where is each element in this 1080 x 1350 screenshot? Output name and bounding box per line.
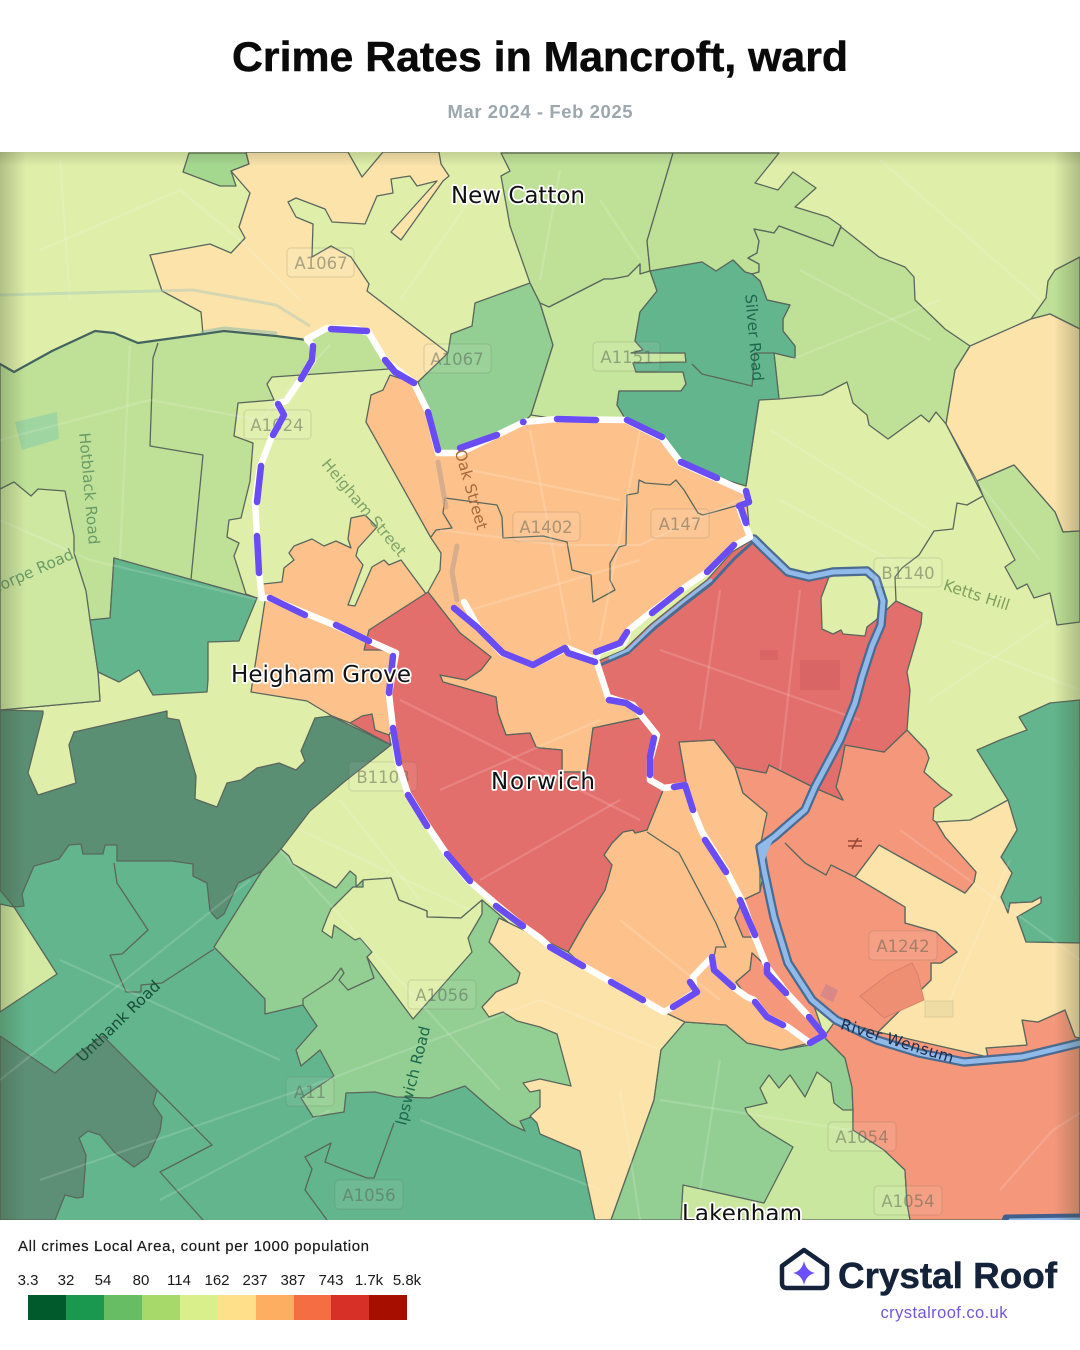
road name labels: Ketts Hill xyxy=(941,576,1012,614)
road name labels: Ipswich Road xyxy=(392,1024,434,1127)
legend scale values: 162 xyxy=(204,1272,230,1289)
legend scale values: 54 xyxy=(95,1272,111,1289)
place labels: Lakenham xyxy=(682,1201,802,1227)
road shields: A1067 xyxy=(430,350,484,369)
legend xyxy=(18,1238,422,1320)
road name labels: Silver Road xyxy=(741,293,767,382)
brand name: Crystal Roof xyxy=(838,1255,1058,1296)
road name labels: Hotblack Road xyxy=(75,432,103,545)
road shields xyxy=(244,248,942,1215)
ward boundary: white line southern loop xyxy=(255,339,824,1043)
ward boundary: white line xyxy=(307,328,750,665)
road name labels: Unthank Road xyxy=(73,977,164,1066)
place labels: Heigham Grove xyxy=(231,662,411,688)
legend scale values xyxy=(18,1272,422,1289)
choropleth map panel xyxy=(0,152,1080,1227)
legend scale values: 3.3 xyxy=(18,1272,38,1289)
ward boundary: purple dashes xyxy=(257,329,824,1043)
map regions: crime-rate shaded areas xyxy=(0,152,1080,1220)
road shields: A1054 xyxy=(835,1128,889,1147)
place labels xyxy=(231,183,802,1227)
grey road strip along Oak Street xyxy=(438,462,457,600)
legend scale values: 387 xyxy=(280,1272,306,1289)
River Wensum xyxy=(0,328,1080,1224)
road name labels xyxy=(0,293,1012,1127)
road shields: A1151 xyxy=(600,348,654,367)
brand logo xyxy=(782,1250,1058,1322)
legend scale values: 237 xyxy=(242,1272,268,1289)
legend colour bar xyxy=(28,1295,407,1320)
place labels: Norwich xyxy=(491,769,595,795)
road shields: B1108 xyxy=(356,768,410,787)
title: Crime Rates in Mancroft, ward xyxy=(232,33,848,80)
road shields: A1242 xyxy=(876,937,930,956)
brand url: crystalroof.co.uk xyxy=(880,1304,1008,1322)
boundary lines between neighbourhoods xyxy=(110,343,983,1220)
icon: railway station xyxy=(848,838,862,849)
subtitle: date range: Mar 2024 - Feb 2025 xyxy=(448,101,632,122)
legend scale values: 114 xyxy=(167,1272,191,1289)
road shields: A1054 xyxy=(881,1192,935,1211)
road shields: A147 xyxy=(659,515,701,534)
legend scale values: 32 xyxy=(58,1272,74,1289)
road shields: A1024 xyxy=(250,416,304,435)
legend title: All crimes Local Area, count per 1000 population xyxy=(18,1238,369,1255)
road shields: A1056 xyxy=(415,986,469,1005)
map edge vignette xyxy=(0,152,1080,1220)
street network overlay xyxy=(0,160,1080,1220)
road name labels: Heigham Street xyxy=(318,455,410,560)
legend scale values: 5.8k xyxy=(393,1272,422,1289)
disused railway line xyxy=(0,290,310,326)
road shields: A1067 xyxy=(294,254,348,273)
road name labels: Oak Street xyxy=(451,447,491,532)
landmark patches xyxy=(760,650,953,1018)
road shields: A11 xyxy=(294,1083,326,1102)
road shields: B1140 xyxy=(881,564,935,583)
legend scale values: 1.7k xyxy=(355,1272,384,1289)
icon: house with star xyxy=(782,1250,827,1288)
road name labels: River Wensum xyxy=(838,1015,956,1067)
road shields: A1402 xyxy=(519,518,573,537)
road shields: A1056 xyxy=(342,1186,396,1205)
legend scale values: 80 xyxy=(133,1272,149,1289)
place labels: New Catton xyxy=(451,183,585,209)
legend scale values: 743 xyxy=(318,1272,344,1289)
